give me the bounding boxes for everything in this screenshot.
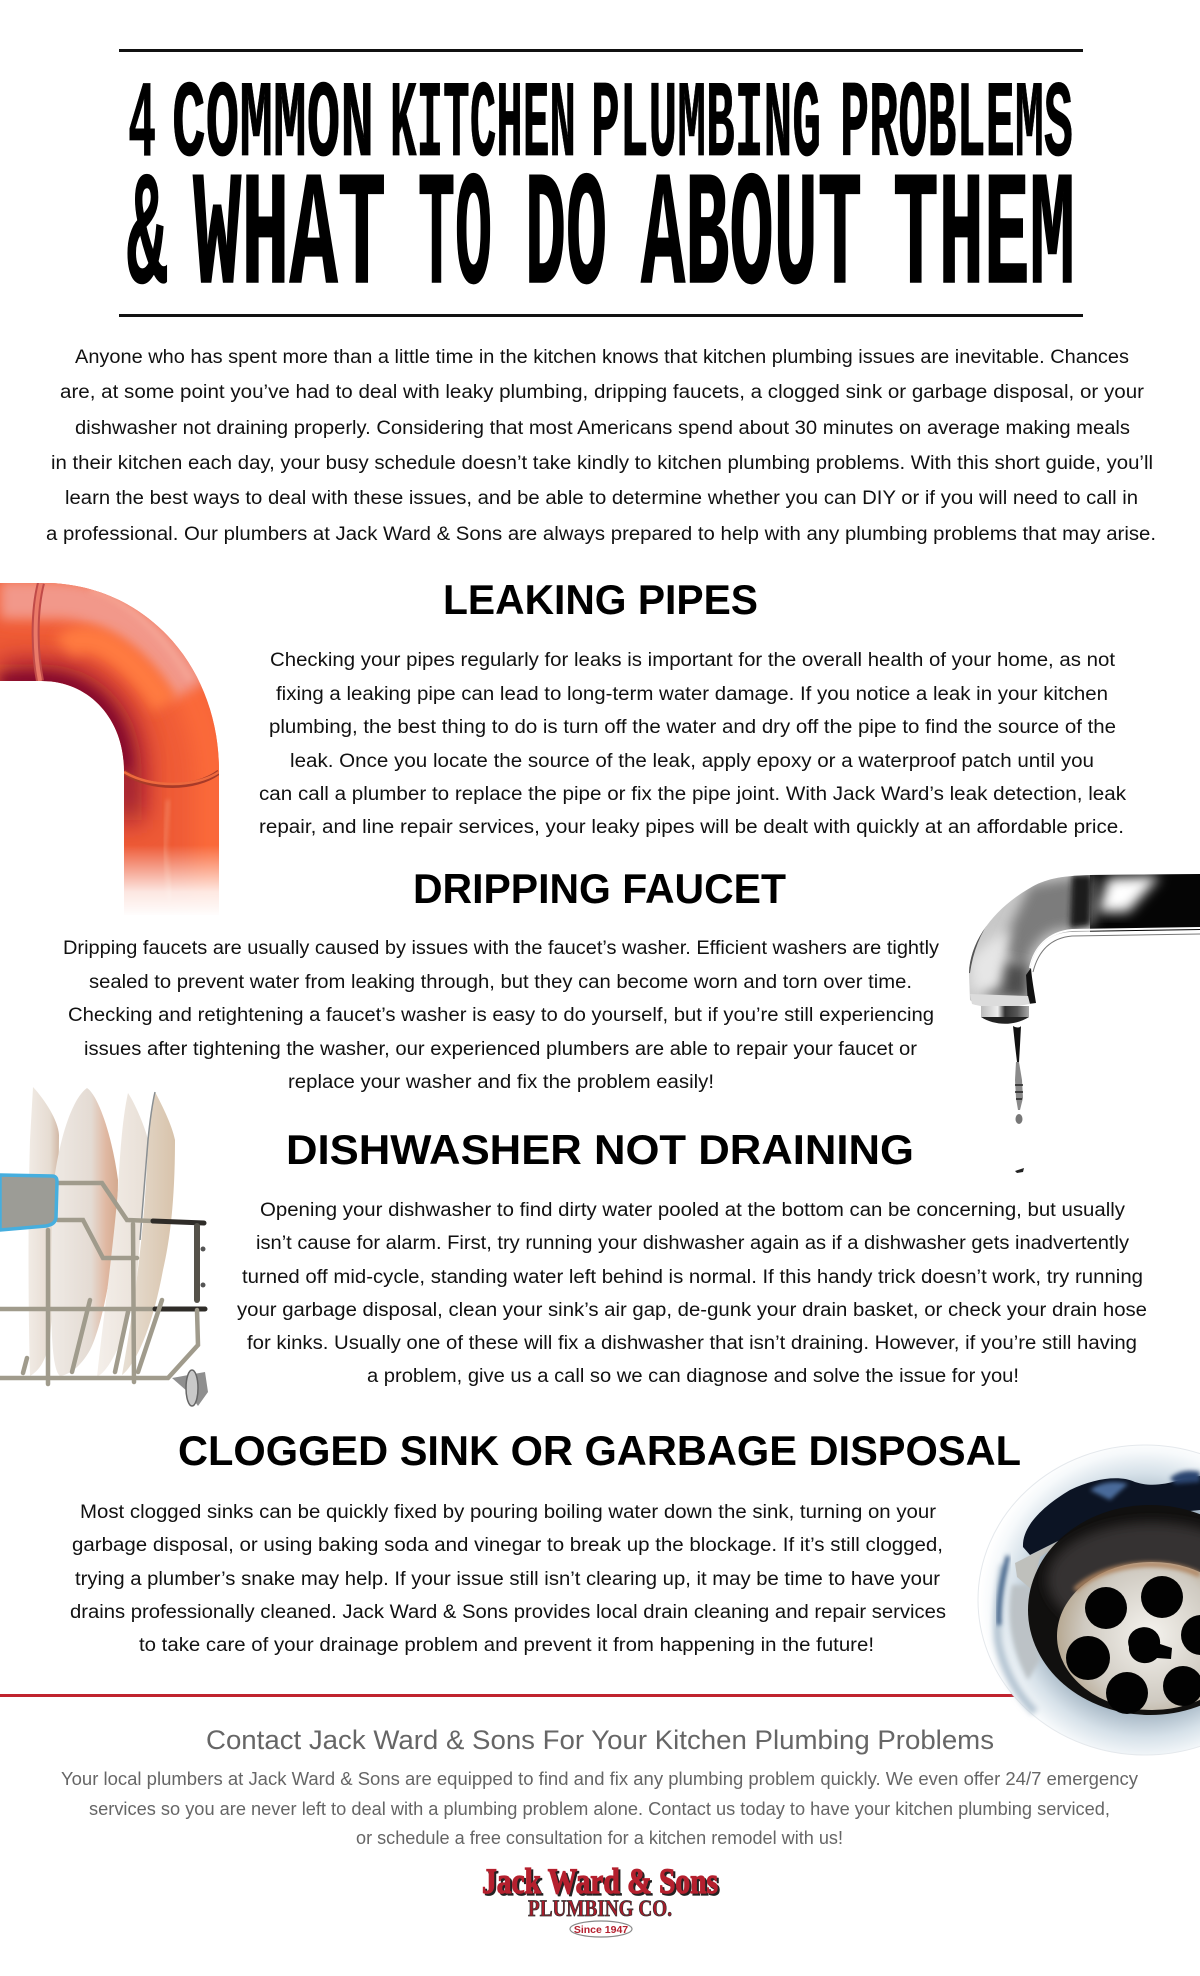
- text: dripping faucet body: [63, 938, 940, 1093]
- title block: &: [127, 147, 167, 331]
- title block: KITCHEN: [390, 64, 576, 188]
- contact text: services so you are never left to deal with a plumbing problem alone. Contact us today to have your kitchen plumbing serviced,: [89, 1799, 1110, 1819]
- icon: dish rack photo: [0, 1087, 208, 1406]
- text: dishwasher body: your garbage disposal, clean your sink’s air gap, de-gunk your drain basket, or check your drain hose: [237, 1300, 1147, 1321]
- heading: dishwasher not draining: DISHWASHER NOT DRAINING: [286, 1126, 914, 1173]
- title block: [119, 49, 1083, 331]
- rack wheel: [172, 1370, 208, 1406]
- intro paragraph: are, at some point you’ve had to deal with leaky plumbing, dripping faucets, a clogged sink or garbage disposal, or your: [60, 382, 1145, 403]
- water drip: [1013, 1026, 1024, 1173]
- title block: ABOUT: [641, 147, 862, 331]
- text: clogged sink body: trying a plumber’s snake may help. If your issue still isn’t clearing up, it may be time to have your: [75, 1569, 941, 1590]
- text: leaking pipes body: Checking your pipes regularly for leaks is important for the overall health of your home, as not: [270, 650, 1116, 671]
- text: dishwasher body: isn’t cause for alarm. First, try running your dishwasher again as if a dishwasher gets inadvertently: [256, 1233, 1130, 1254]
- rack handle: [0, 1175, 57, 1230]
- text: clogged sink body: to take care of your drainage problem and prevent it from happening in the future!: [139, 1635, 874, 1656]
- intro paragraph: [46, 347, 1156, 545]
- text: leaking pipes body: can call a plumber to replace the pipe or fix the pipe joint. With Jack Ward’s leak detection, leak: [259, 784, 1127, 805]
- intro paragraph: dishwasher not draining properly. Considering that most Americans spend about 30 minutes on average making meals: [75, 418, 1130, 439]
- text: dishwasher body: turned off mid-cycle, standing water left behind is normal. If this handy trick doesn’t work, try running: [242, 1267, 1143, 1288]
- intro paragraph: in their kitchen each day, your busy schedule doesn’t take kindly to kitchen plumbing problems. With this short guide, you’ll: [51, 453, 1153, 474]
- text: leaking pipes body: [259, 650, 1127, 838]
- text: clogged sink body: garbage disposal, or using baking soda and vinegar to break up the blockage. If it’s still clogged,: [72, 1535, 943, 1556]
- text: clogged sink body: drains professionally cleaned. Jack Ward & Sons provides local drain cleaning and repair services: [70, 1602, 946, 1623]
- logo: Jack Ward & Sons: PLUMBING CO.: [528, 1896, 672, 1921]
- title block: COMMON: [172, 64, 374, 188]
- title block: 4: [128, 64, 156, 188]
- text: leaking pipes body: leak. Once you locate the source of the leak, apply epoxy or a waterproof patch until you: [290, 751, 1094, 772]
- text: dripping faucet body: Checking and retightening a faucet’s washer is easy to do yourself, but if you’re still experiencing: [68, 1005, 934, 1026]
- contact text: or schedule a free consultation for a kitchen remodel with us!: [356, 1828, 843, 1848]
- logo: Jack Ward & Sons: Jack Ward & Sons: [482, 1861, 718, 1901]
- text: dishwasher body: [237, 1200, 1147, 1387]
- logo: Jack Ward & Sons: Jack Ward & Sons: [484, 1863, 720, 1903]
- drain holes: [1066, 1576, 1200, 1714]
- title block: DO: [525, 147, 607, 331]
- text: dripping faucet body: sealed to prevent water from leaking through, but they can become worn and torn over time.: [89, 972, 912, 993]
- heading: clogged sink: CLOGGED SINK OR GARBAGE DISPOSAL: [178, 1427, 1021, 1474]
- heading: dripping faucet: DRIPPING FAUCET: [413, 865, 786, 912]
- text: dripping faucet body: replace your washer and fix the problem easily!: [288, 1072, 714, 1093]
- logo: Jack Ward & Sons: Since 1947: [574, 1924, 628, 1936]
- contact text: Your local plumbers at Jack Ward & Sons are equipped to find and fix any plumbing problem quickly. We even offer 24/7 emergency: [61, 1769, 1138, 1789]
- logo: Jack Ward & Sons: [482, 1861, 720, 1937]
- text: dishwasher body: a problem, give us a call so we can diagnose and solve the issue for you!: [367, 1366, 1019, 1387]
- heading: leaking pipes: LEAKING PIPES: [443, 576, 758, 623]
- title block: PLUMBING: [591, 64, 821, 188]
- text: dripping faucet body: issues after tightening the washer, our experienced plumbers are able to repair your faucet or: [84, 1039, 918, 1060]
- title block: WHAT: [193, 147, 386, 331]
- text: dishwasher body: for kinks. Usually one of these will fix a dishwasher that isn’t draining. However, if you’re still having: [247, 1333, 1137, 1354]
- title block: TO: [418, 147, 492, 331]
- text: clogged sink body: Most clogged sinks can be quickly fixed by pouring boiling water down the sink, turning on your: [80, 1502, 937, 1523]
- divider rule: [0, 1694, 1016, 1697]
- contact text: [61, 1769, 1138, 1848]
- text: dishwasher body: Opening your dishwasher to find dirty water pooled at the bottom can be concerning, but usually: [260, 1200, 1126, 1221]
- contact heading: Contact Jack Ward & Sons For Your Kitchen Plumbing Problems: [206, 1725, 994, 1755]
- icon: dripping faucet photo: [960, 870, 1200, 1173]
- rack wires: [0, 1183, 205, 1384]
- text: leaking pipes body: plumbing, the best thing to do is turn off the water and dry off the pipe to find the source of the: [269, 717, 1116, 738]
- intro paragraph: learn the best ways to deal with these issues, and be able to determine whether you can DIY or if you will need to call in: [65, 488, 1138, 509]
- intro paragraph: a professional. Our plumbers at Jack Ward & Sons are always prepared to help with any plumbing problems that may arise.: [46, 524, 1156, 545]
- text: leaking pipes body: fixing a leaking pipe can lead to long-term water damage. If you notice a leak in your kitchen: [276, 684, 1108, 705]
- pipe welds: [36, 583, 219, 786]
- text: dripping faucet body: Dripping faucets are usually caused by issues with the faucet’s washer. Efficient washers are tightly: [63, 938, 940, 959]
- icon: sink drain photo: [978, 1445, 1200, 1755]
- text: leaking pipes body: repair, and line repair services, your leaky pipes will be dealt with quickly at an affordable price.: [259, 817, 1124, 838]
- icon: red pipe photo: [0, 575, 225, 920]
- intro paragraph: Anyone who has spent more than a little time in the kitchen knows that kitchen plumbing issues are inevitable. Chances: [75, 347, 1129, 368]
- text: clogged sink body: [70, 1502, 946, 1656]
